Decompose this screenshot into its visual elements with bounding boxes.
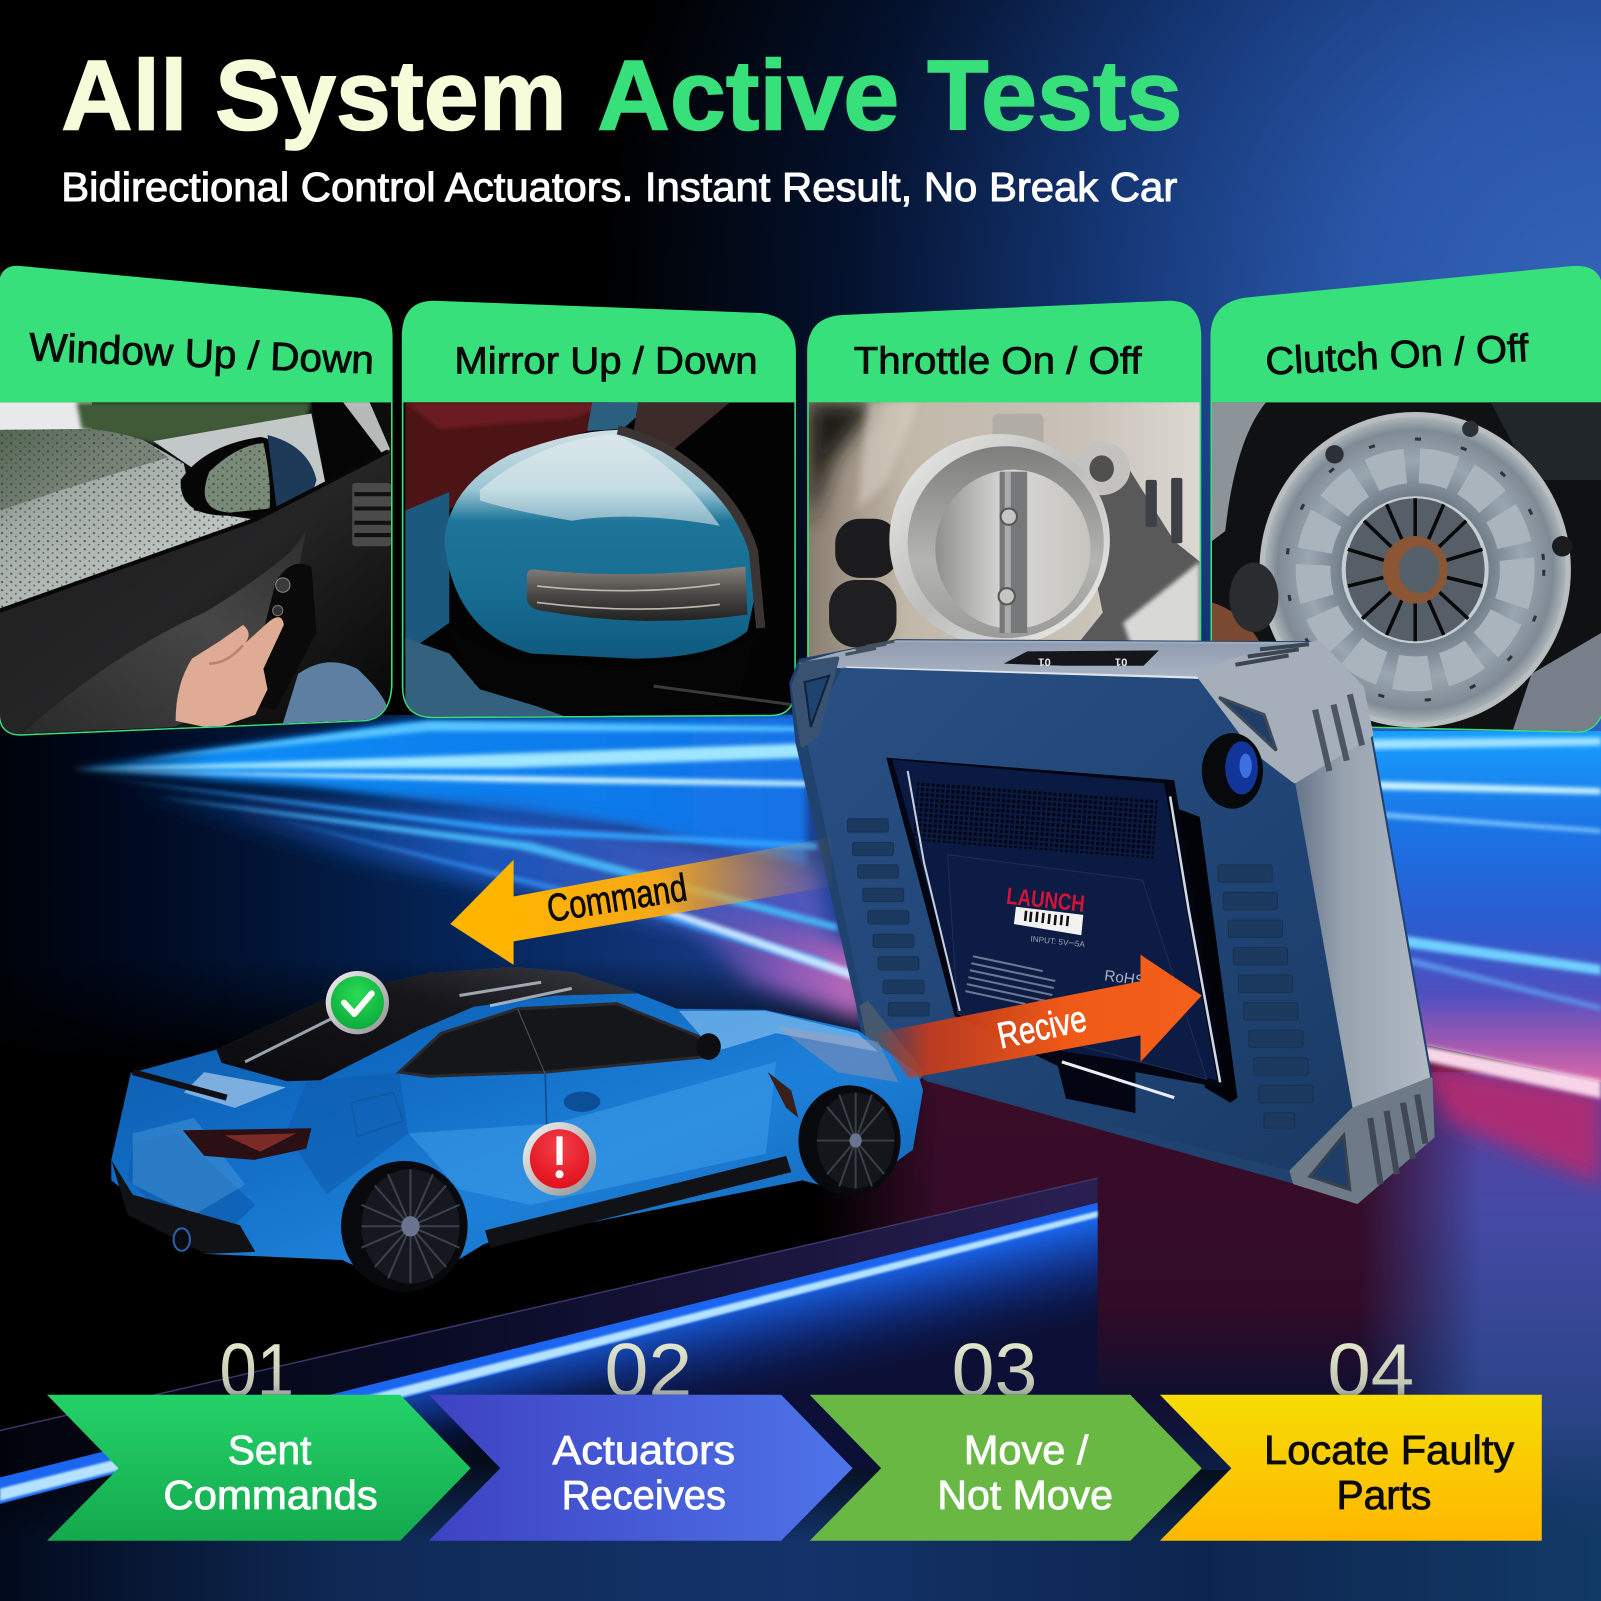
fender vent <box>768 1072 798 1118</box>
rear wheel <box>341 1161 468 1292</box>
top right corner bumper <box>1201 643 1370 780</box>
floor platform <box>0 1178 1098 1532</box>
front wheel <box>798 1085 901 1196</box>
icon: green check badge <box>326 971 389 1034</box>
step numbers: 02 <box>604 1329 692 1413</box>
right side slots <box>1218 865 1313 1128</box>
spoiler <box>133 1072 227 1098</box>
barcode <box>1014 907 1083 935</box>
side windows <box>399 1004 705 1076</box>
step 1: sent commands: Commands <box>163 1472 378 1518</box>
arrow: recive <box>875 955 1202 1078</box>
wing mirror <box>696 1033 721 1060</box>
rear bumper dark <box>111 1160 255 1254</box>
step 4: locate faulty parts: Parts <box>1337 1472 1432 1518</box>
kickstand right shadow <box>1172 807 1238 1103</box>
tablet device: RoHS <box>1103 967 1146 990</box>
step numbers <box>222 1343 1412 1395</box>
left side slots <box>847 819 929 1016</box>
step numbers: 04 <box>1327 1329 1414 1413</box>
title <box>61 40 1182 151</box>
top edge <box>800 641 1318 679</box>
step 2: actuators receives <box>429 1395 853 1541</box>
panel: throttle on / off <box>807 300 1202 658</box>
step numbers: 03 <box>952 1329 1037 1413</box>
step numbers: 01 <box>220 1329 294 1413</box>
taillight <box>183 1128 311 1160</box>
exhaust <box>174 1228 190 1251</box>
dark rear panel <box>892 760 1217 1080</box>
title: All System <box>61 40 567 151</box>
tablet device: 01 <box>1038 656 1051 668</box>
roof and rear glass <box>216 967 638 1081</box>
left edge lower bumper <box>860 1001 924 1082</box>
photo: rainy car window and door switch <box>0 402 391 739</box>
step 1: sent commands <box>47 1395 471 1541</box>
tablet device: 01 <box>1115 656 1127 668</box>
step 2: actuators receives: Actuators <box>552 1427 735 1473</box>
logo: LAUNCH <box>1005 883 1086 917</box>
tablet device: INPUT: 5V⎓5A <box>1030 934 1086 949</box>
lens <box>1202 733 1263 809</box>
card label: Throttle On / Off <box>854 341 1142 383</box>
side skirt <box>485 1156 791 1248</box>
step 4: locate faulty parts: Locate Faulty <box>1264 1427 1515 1473</box>
arrow: command <box>450 837 832 965</box>
step 3: move / not move: Not Move <box>937 1472 1113 1518</box>
kickstand frame <box>886 758 1225 1113</box>
light streaks <box>71 715 1601 1099</box>
kickstand highlights <box>908 771 960 1011</box>
step 4: locate faulty parts <box>1160 1395 1542 1541</box>
car body <box>111 967 923 1290</box>
body highlights <box>408 1062 776 1205</box>
arrow: recive: Recive <box>994 998 1090 1056</box>
card label: Mirror Up / Down <box>454 341 758 383</box>
panel: mirror up / down <box>403 302 795 719</box>
panel: clutch on / off <box>1212 267 1601 739</box>
step 2: actuators receives: Receives <box>562 1472 726 1518</box>
card label: Window Up / Down <box>28 325 375 383</box>
fuel door and handle <box>351 1093 403 1136</box>
blue face <box>807 668 1353 1171</box>
right grey side <box>1295 734 1430 1110</box>
step 3: move / not move: Move / <box>964 1427 1089 1473</box>
arrow: command: Command <box>544 866 690 931</box>
card label: Clutch On / Off <box>1264 327 1530 384</box>
subtitle: Bidirectional Control Actuators. Instant Result, No Break Car <box>61 164 1177 210</box>
icon: red alert badge <box>523 1122 596 1196</box>
tablet device <box>791 641 1433 1202</box>
panel: window up / down <box>0 267 391 739</box>
device back shell <box>791 641 1433 1202</box>
top left corner bumper <box>793 659 837 745</box>
regulatory text <box>965 955 1057 1010</box>
photo: throttle body <box>808 402 1200 657</box>
bottom right corner bumper <box>1292 1079 1433 1202</box>
step 3: move / not move <box>810 1395 1202 1541</box>
step 1: sent commands: Sent <box>228 1427 312 1473</box>
photo: clutch pressure plate <box>1212 402 1601 739</box>
car <box>111 967 923 1292</box>
title: Active Tests <box>597 40 1182 151</box>
photo: blue side mirror <box>403 402 795 719</box>
